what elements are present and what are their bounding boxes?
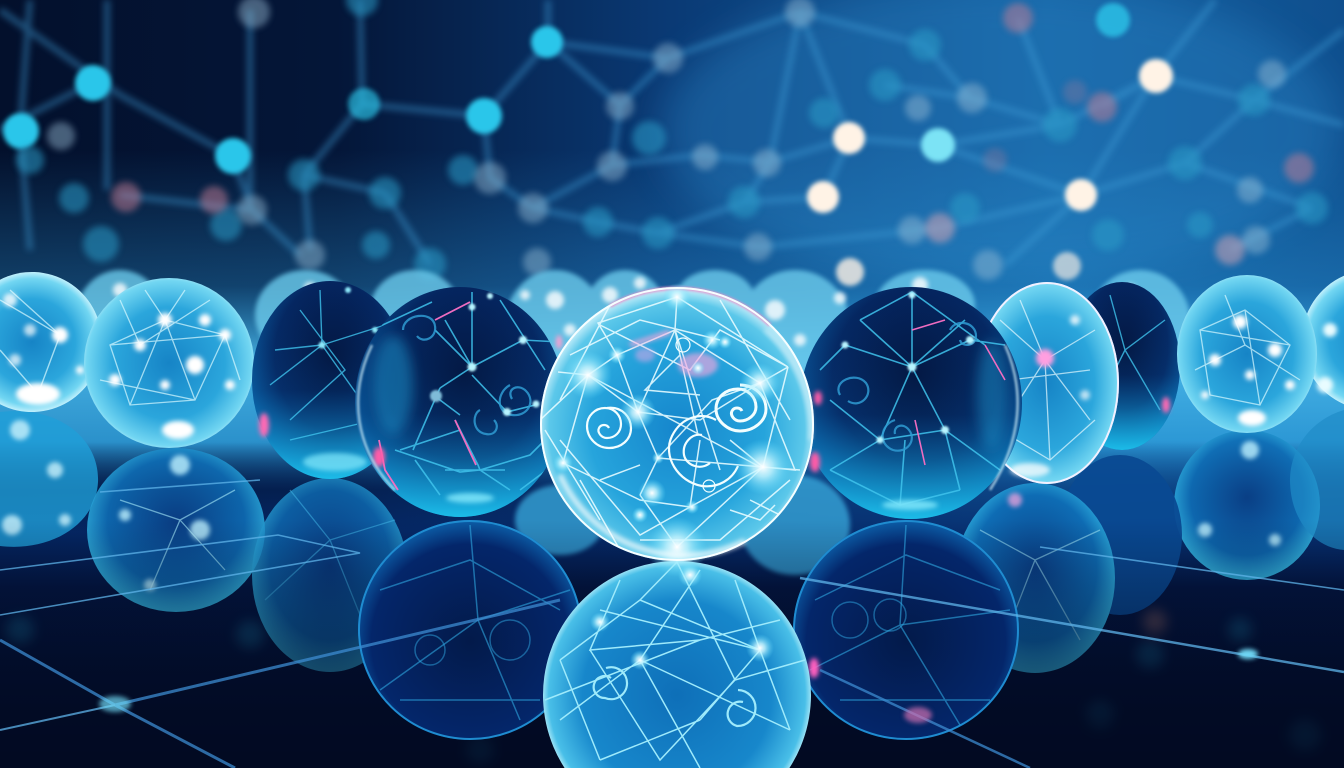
reflection: dark right back [1058,455,1182,615]
sphere: central glass sphere [540,283,814,577]
reflection: bright right [955,483,1115,673]
bright nodes [553,283,791,577]
sphere: bright right 2 [1177,275,1317,433]
reflection: far right [1174,410,1344,580]
shading over side reflections [0,520,1344,768]
sphere: far right bright [1302,276,1344,404]
floor grid lines [0,480,1344,768]
reflection: center sphere [543,561,811,768]
reflections of spheres [0,410,1344,768]
sphere: bright right [975,282,1119,484]
pink accents [630,332,718,377]
floor [0,440,1344,768]
rim [541,288,813,560]
sphere: dark left [355,287,565,517]
back row of spheres [75,270,1190,380]
sphere: dark right back [1064,282,1180,450]
reflection: back right glow [740,475,850,575]
network lines [0,0,1344,265]
constellation lines [540,297,800,550]
reflection: dark right [793,520,1019,740]
reflection: dark left back [252,478,408,672]
reflection: bright left [87,448,265,612]
sphere: bright left [84,278,254,448]
pink iridescence on sphere top [610,288,770,325]
sphere: dark left back [252,281,408,479]
reflection: back left glow [515,485,605,555]
glow spots on floor lines [99,649,1258,723]
reflection: far left [0,411,98,547]
network nodes [3,0,1328,286]
spirals [587,338,766,492]
sphere: far left bright [0,272,102,412]
sphere: dark right [800,287,1022,519]
reflection: dark left [358,520,582,740]
